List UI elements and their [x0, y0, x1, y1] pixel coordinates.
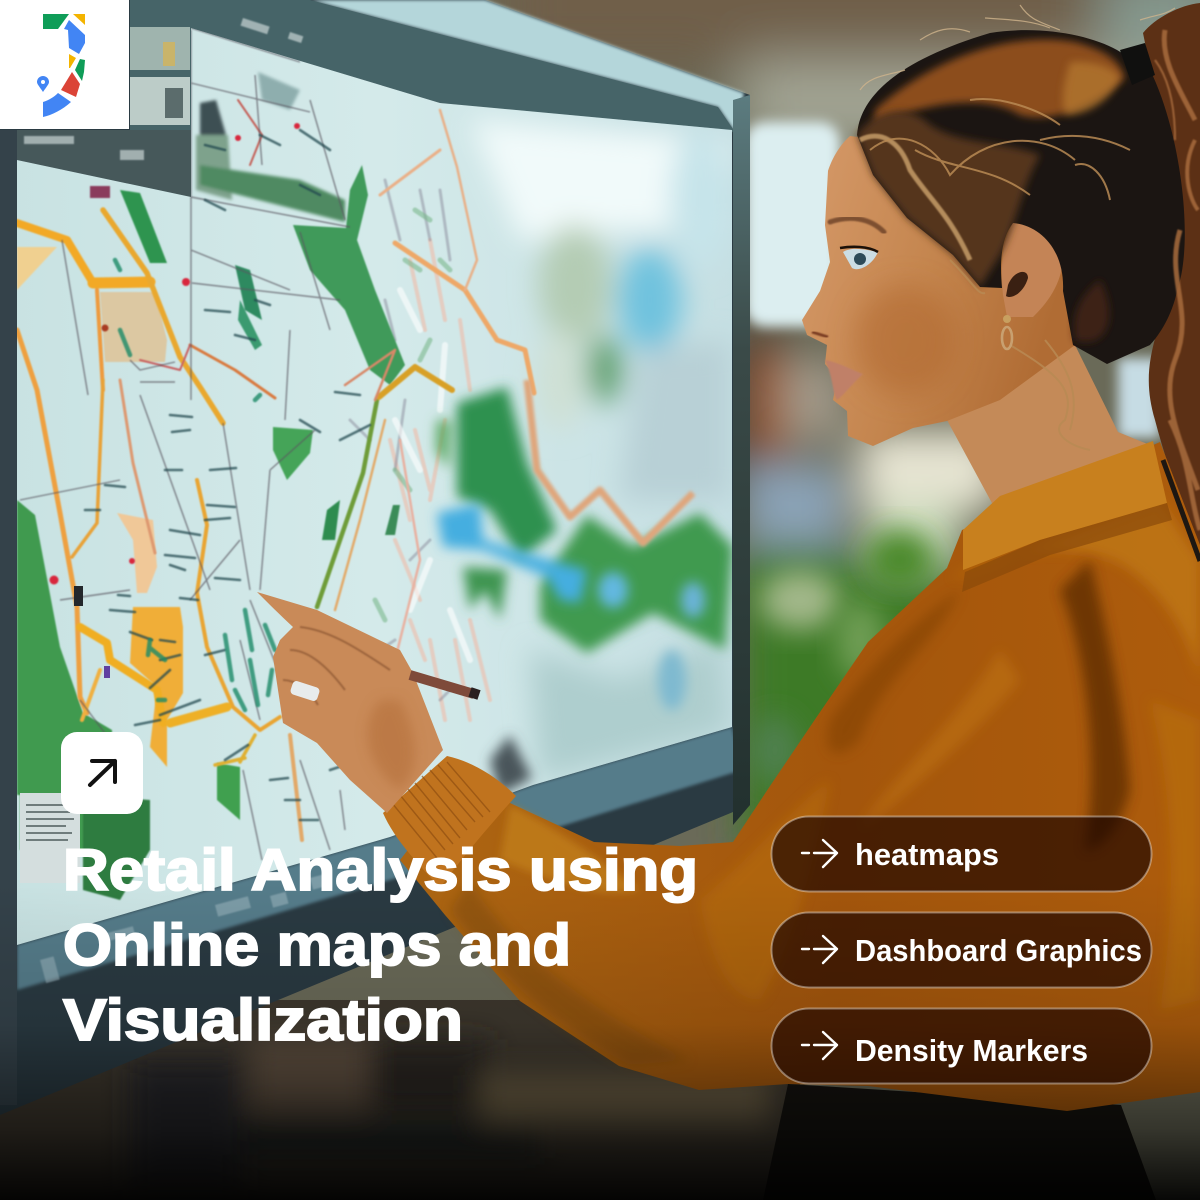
map: shadow smudge: [490, 735, 532, 795]
woman: pen: [410, 675, 479, 695]
monitor: dark header band: [130, 0, 735, 197]
woman: face: [802, 136, 1075, 446]
logo: red segment: [61, 72, 80, 97]
woman: neck: [947, 330, 1150, 505]
map: mottled mid-distance streets: [345, 180, 490, 760]
monitor: left control panel: [0, 130, 191, 197]
map: dark pin markers: [74, 586, 110, 678]
woman: ponytail: [1143, 3, 1200, 560]
pill: heatmaps: heatmaps: [855, 837, 999, 872]
arrow button: [61, 732, 143, 814]
woman: lips: [825, 360, 863, 400]
map: legend panel: [20, 793, 80, 883]
map: yellow built-up blocks: [17, 247, 183, 767]
woman: trousers: [763, 1084, 1156, 1200]
woman: hair tie: [1120, 43, 1155, 85]
woman: shoulder highlight: [950, 500, 1200, 680]
map: teal park mottling: [115, 260, 275, 710]
woman: eye and brow: [830, 218, 884, 269]
woman: cheek glow: [855, 285, 955, 395]
logo: blue segment: [64, 20, 85, 54]
dark gradient overlay: [0, 880, 1200, 1200]
woman: [257, 3, 1200, 1200]
logo: yellow top: [73, 14, 85, 25]
logo tile: [0, 0, 129, 129]
pill: heatmaps: [772, 816, 1152, 892]
logo: green top: [43, 14, 69, 29]
woman: sleeve folds: [827, 590, 960, 753]
monitor: grey thumbnail tiles: [130, 27, 190, 125]
pill: dashboard graphics: Dashboard Graphics: [855, 933, 1142, 968]
map on the screen: [17, 28, 732, 945]
desk at the bottom: [0, 1000, 800, 1200]
title: Online maps and: [63, 913, 571, 978]
title: [63, 838, 698, 1053]
woman: shirt cuff: [383, 756, 516, 888]
logo: map pin: [37, 76, 49, 92]
map: blurred far road: [527, 380, 693, 543]
map: thin streets: [20, 28, 350, 860]
monitor: pale lower band: [17, 727, 742, 990]
pill: density markers: [772, 1008, 1152, 1084]
monitor: frame and bezel: [0, 0, 750, 1115]
woman: hand: [257, 592, 443, 813]
woman: earring: [1002, 315, 1012, 349]
map: blurred water: [437, 503, 705, 710]
woman: ring: [290, 680, 320, 702]
woman: ponytail curls: [1155, 30, 1200, 530]
logo: green segment: [75, 59, 85, 81]
logo: blue tail: [43, 93, 71, 117]
woman: collar: [963, 441, 1167, 570]
monitor: pale top band: [310, 0, 744, 132]
woman: nostril: [812, 332, 828, 337]
map: blurred green district: [436, 387, 733, 653]
monitor: panel caption marks: [24, 18, 303, 160]
title: Retail Analysis using: [63, 838, 698, 903]
map: dark labels: [85, 130, 370, 820]
title: Visualization: [63, 988, 463, 1053]
woman: flyaway hairs: [860, 5, 1175, 90]
map: inset thumbnail shading: [196, 72, 345, 222]
pill: density markers: Density Markers: [855, 1033, 1088, 1068]
woman: crown highlights: [875, 39, 1125, 125]
woman: shirt: [400, 441, 1200, 1111]
woman: hair strands: [870, 99, 1130, 450]
pill: dashboard graphics: [772, 912, 1152, 988]
woman: strap: [1163, 460, 1200, 561]
woman: temple hair: [857, 111, 1040, 287]
woman: ear: [1002, 222, 1063, 317]
map: main roads: [17, 100, 534, 840]
monitor: right edge of frame: [733, 95, 750, 825]
map: near-side green parks: [17, 165, 405, 900]
map: soft far side colours: [470, 120, 730, 780]
woman: hair: [857, 5, 1185, 450]
map: red location markers: [50, 123, 300, 584]
monitor: status bar text marks: [40, 874, 327, 983]
logo: small yellow: [69, 54, 76, 68]
